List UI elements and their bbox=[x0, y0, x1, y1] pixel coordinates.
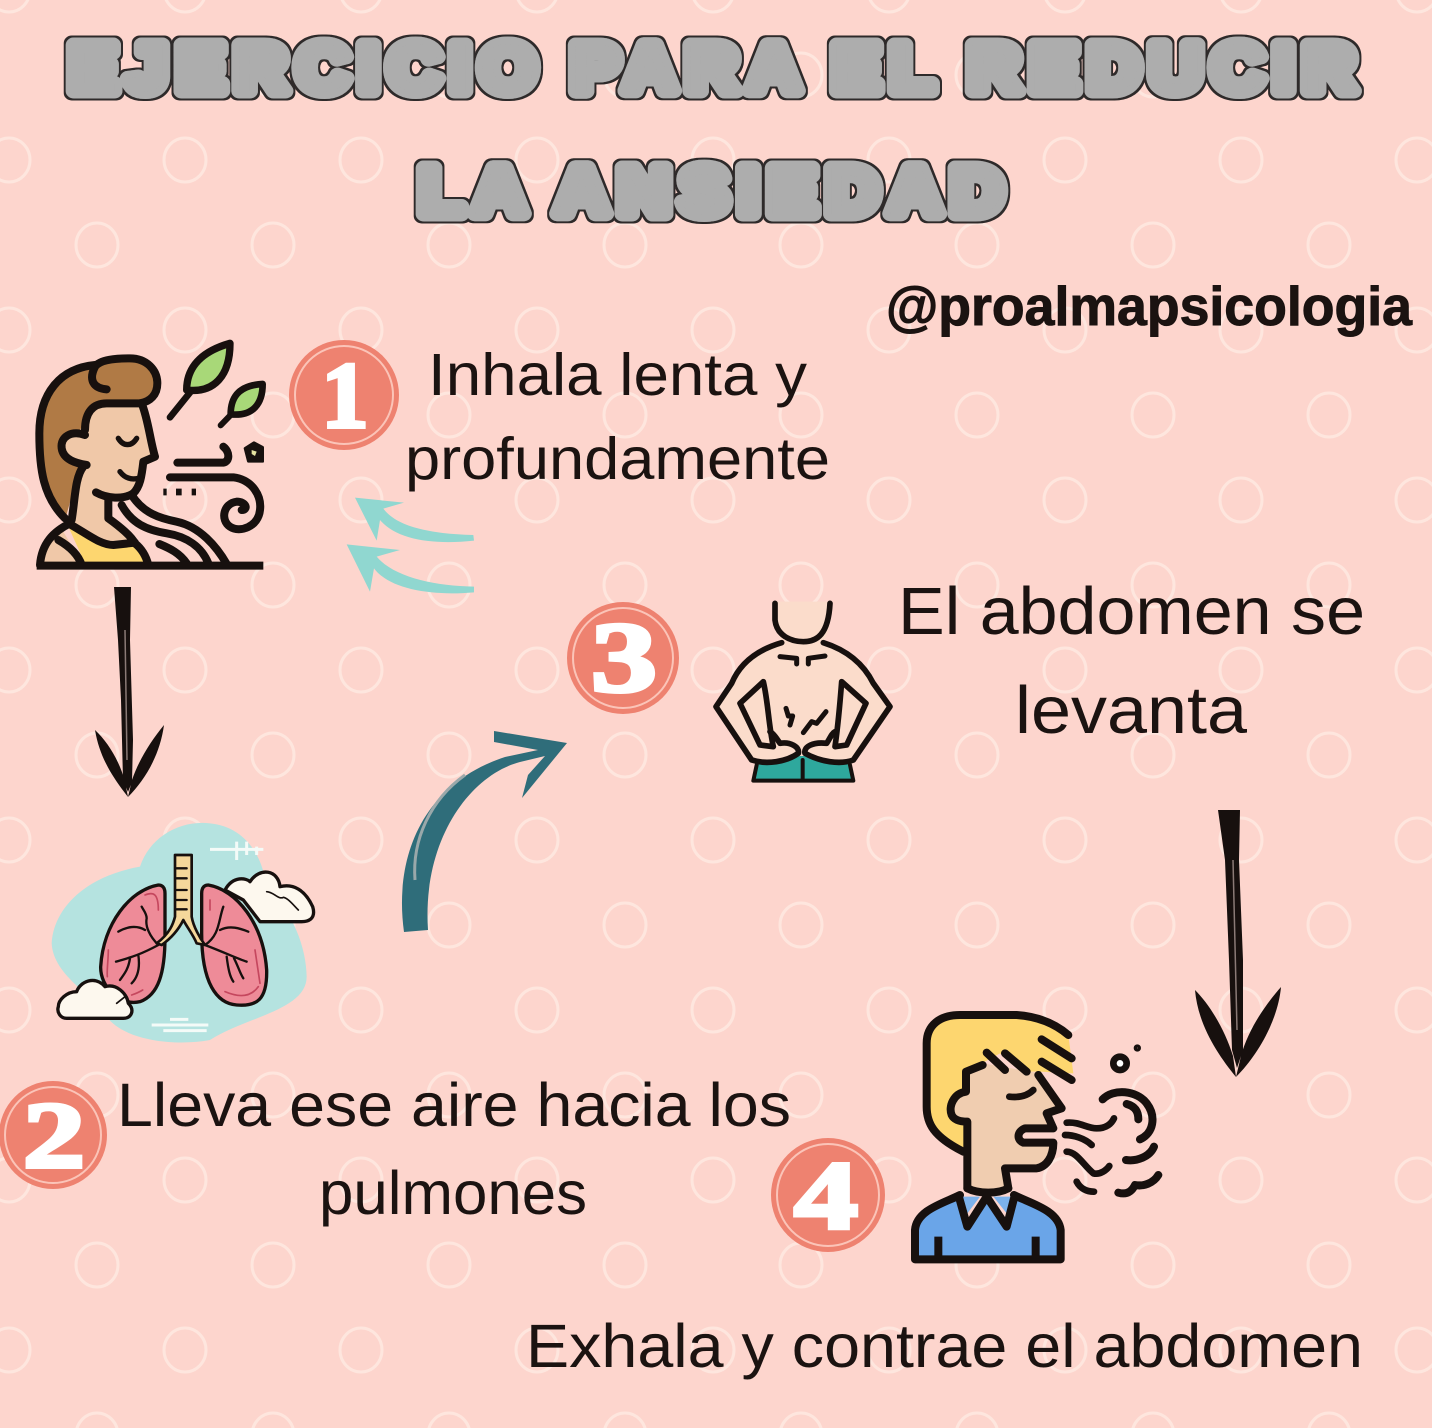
arrow: curved to step 3 bbox=[402, 731, 567, 932]
icon: teal arrows bbox=[347, 498, 474, 593]
badge 4 bbox=[771, 1138, 885, 1252]
icon: abdomen bbox=[715, 602, 890, 781]
badge 2: 2 bbox=[23, 1084, 85, 1188]
badge 4: 4 bbox=[794, 1142, 858, 1250]
step 2 text: pulmones bbox=[319, 1159, 587, 1227]
title bbox=[69, 31, 1365, 229]
arrow: down to lungs bbox=[95, 587, 164, 797]
badge 3: 3 bbox=[591, 602, 657, 713]
badge 1: 1 bbox=[322, 344, 368, 448]
handle: @proalmapsicologia bbox=[886, 275, 1412, 337]
step 1 text: Inhala lenta y bbox=[428, 342, 808, 408]
arrow: down to step 4 bbox=[1195, 810, 1281, 1077]
step 3 text: levanta bbox=[1015, 673, 1248, 748]
step 3 text bbox=[898, 574, 1365, 748]
title: LA ANSIEDAD bbox=[419, 154, 1013, 229]
step 4 text: Exhala y contrae el abdomen bbox=[526, 1312, 1363, 1380]
step 1 text: profundamente bbox=[405, 426, 830, 492]
step 1 text bbox=[405, 342, 830, 492]
icon: person inhaling bbox=[37, 343, 263, 566]
badge 2 bbox=[0, 1081, 107, 1189]
step 3 text: El abdomen se bbox=[898, 574, 1365, 649]
icon: person exhaling bbox=[915, 1015, 1158, 1259]
badge 3 bbox=[567, 602, 679, 714]
step 2 text: Lleva ese aire hacia los bbox=[117, 1071, 791, 1139]
title: EJERCICIO PARA EL REDUCIR bbox=[69, 31, 1365, 106]
icon: lungs bbox=[52, 823, 314, 1042]
badge 1 bbox=[289, 340, 399, 450]
step 2 text bbox=[117, 1071, 791, 1227]
